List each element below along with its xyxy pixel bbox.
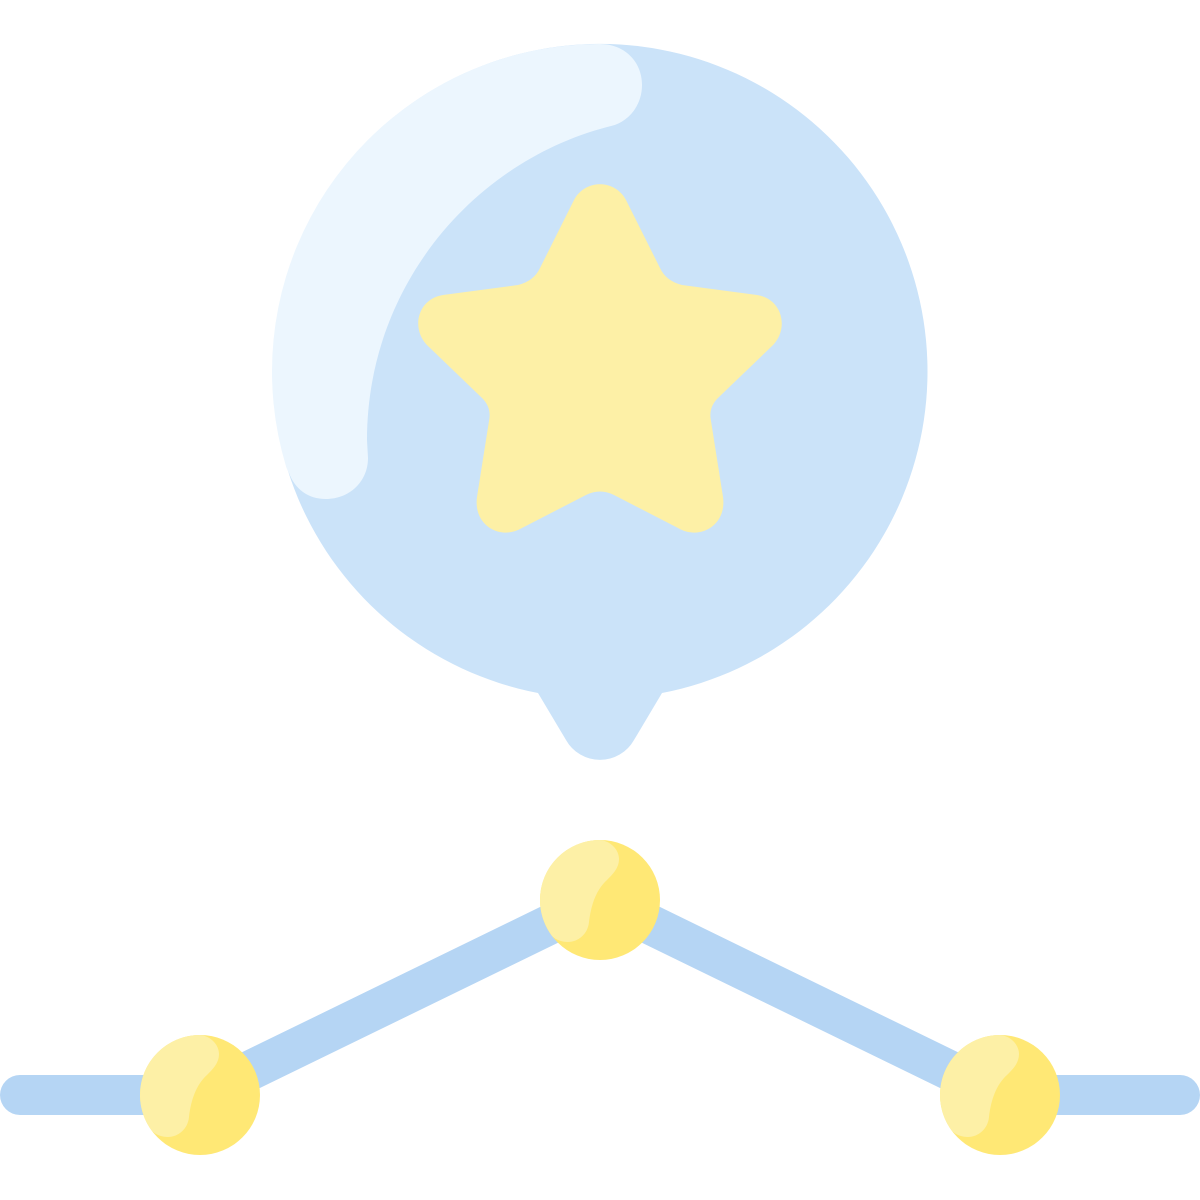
right node	[940, 1035, 1060, 1155]
center node	[540, 840, 660, 960]
left node	[140, 1035, 260, 1155]
speech bubble with star	[250, 30, 928, 760]
star	[418, 184, 782, 533]
chart line	[20, 900, 1180, 1095]
bubble highlight	[250, 30, 642, 499]
bubble body	[272, 44, 928, 760]
line chart	[20, 840, 1180, 1155]
